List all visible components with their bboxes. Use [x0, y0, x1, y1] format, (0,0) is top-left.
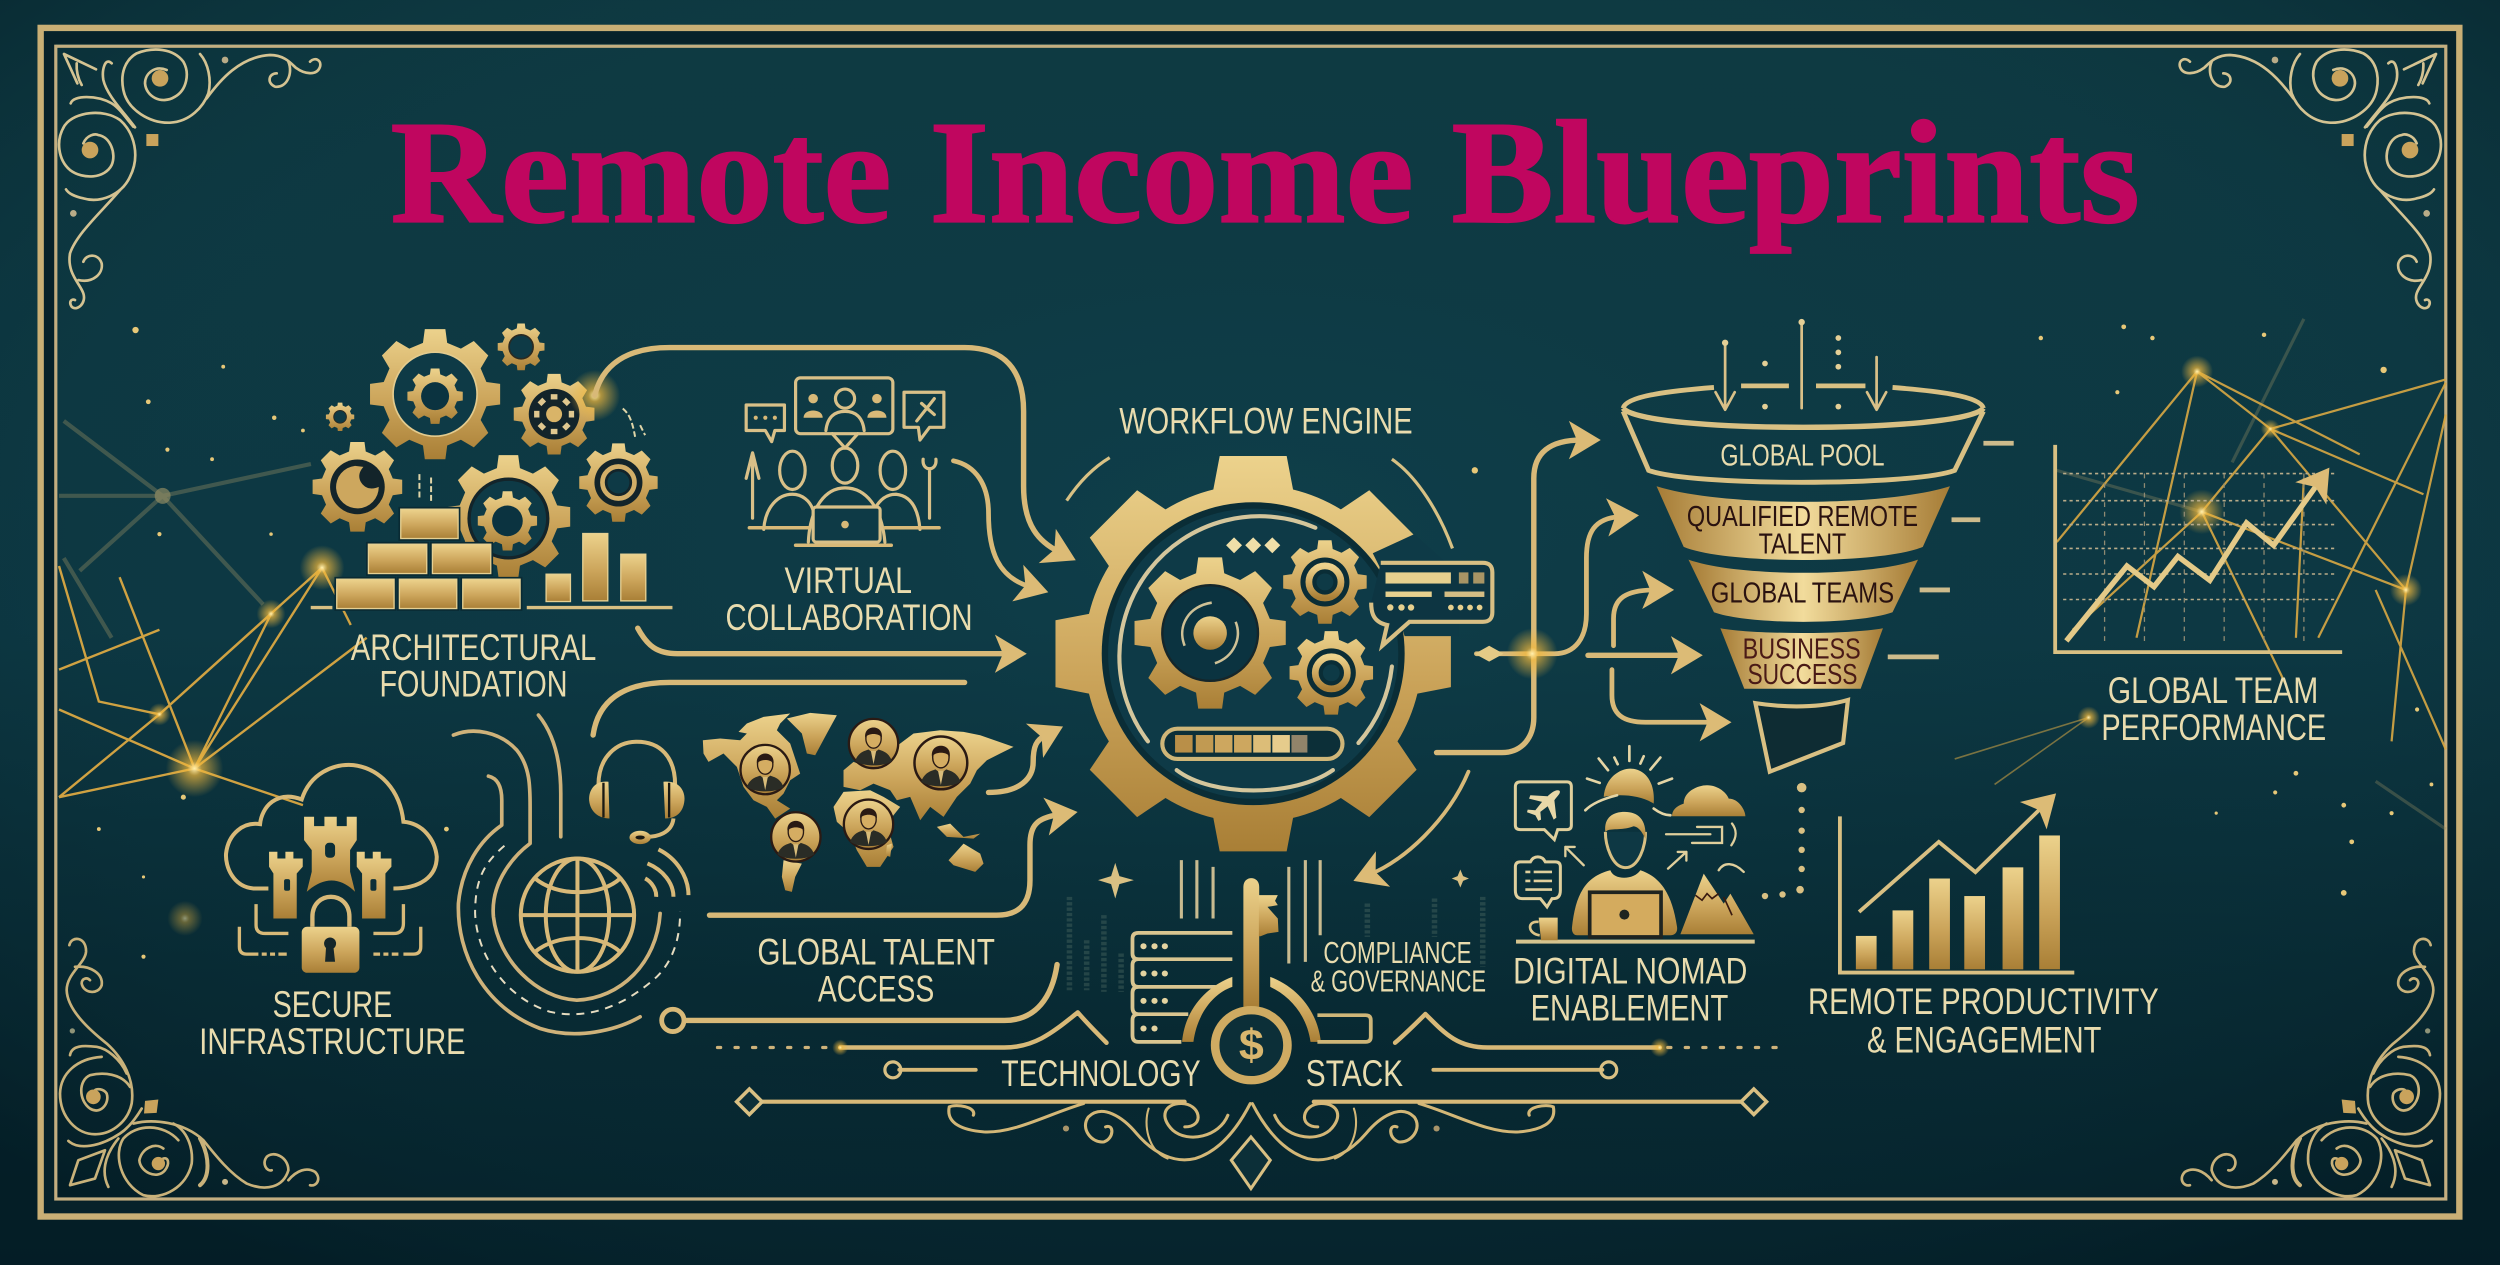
label	[725, 560, 973, 638]
label: compliance	[1311, 937, 1486, 999]
funnel: global pool: GLOBAL POOL	[1720, 440, 1885, 473]
panel: technology stack	[717, 860, 1783, 1189]
dotted connector	[1762, 783, 1806, 899]
label	[199, 984, 466, 1062]
icon: world map with portraits	[703, 713, 1014, 892]
funnel: qualified remote talent: QUALIFIED REMOTE	[1687, 501, 1918, 533]
panel: global team performance	[2055, 445, 2342, 748]
corner ornament: bottom left	[60, 939, 318, 1196]
label: INFRASTRUCTURE	[199, 1021, 466, 1062]
icon: key and dollar coin	[1182, 878, 1371, 1080]
label: technology stack: TECHNOLOGY	[1001, 1053, 1201, 1094]
icon: main gear	[1055, 456, 1492, 851]
label: PERFORMANCE	[2101, 707, 2326, 748]
funnel: business success: SUCCESS	[1747, 659, 1857, 691]
panel: workflow engine	[1055, 401, 1492, 851]
chart: rising bars	[1840, 807, 2074, 973]
label: technology stack	[1001, 1053, 1404, 1094]
label	[2101, 670, 2326, 748]
funnel: global teams: GLOBAL TEAMS	[1711, 578, 1894, 610]
network constellation: left	[59, 421, 367, 936]
icon: inflow arrows	[1716, 319, 1886, 410]
icon: data columns	[1069, 897, 1483, 992]
funnel: global teams	[1688, 560, 1918, 622]
icon: server stack	[1132, 933, 1232, 1042]
panel: digital nomad enablement	[1513, 746, 1755, 1028]
funnel: qualified remote talent: TALENT	[1759, 528, 1846, 560]
big gear	[370, 329, 500, 459]
gear with crescent	[313, 442, 402, 532]
label: COLLABORATION	[725, 597, 973, 638]
label	[1808, 981, 2159, 1060]
funnel: business success	[1720, 628, 1883, 691]
bars	[546, 534, 646, 602]
funnel: spout	[1755, 700, 1848, 772]
decor vertical lines	[1181, 860, 1320, 964]
label: compliance: & GOVERNANCE	[1311, 966, 1486, 999]
label: FOUNDATION	[379, 664, 568, 705]
funnel: qualified remote talent	[1657, 486, 1950, 560]
label: VIRTUAL	[784, 560, 912, 601]
icon: globe, headset and orbit rings	[453, 715, 688, 1034]
mid gear	[447, 455, 570, 579]
chart: line over grid	[2055, 445, 2342, 652]
label: REMOTE PRODUCTIVITY	[1808, 981, 2159, 1022]
icon: key and dollar coin: $	[1239, 1022, 1264, 1070]
funnel side dashes	[1888, 443, 2014, 657]
panel: architectural foundation	[311, 323, 672, 705]
corner ornament: top right	[2180, 50, 2441, 308]
icon: diamonds	[1226, 537, 1280, 553]
icon: key, servers, flourish	[949, 860, 1554, 1189]
label: & ENGAGEMENT	[1867, 1019, 2101, 1060]
panel: global talent access	[703, 713, 1014, 1009]
tiny gear	[326, 403, 354, 431]
icon: sparkles	[1098, 863, 1469, 899]
heading: WORKFLOW ENGINE	[1119, 401, 1413, 442]
connector: lower circuit line	[662, 965, 1057, 1032]
funnel: global pool	[1623, 386, 1983, 482]
corner ornament: top left	[59, 50, 320, 308]
panel: secure infrastructure	[199, 765, 466, 1062]
label	[757, 932, 995, 1009]
label: DIGITAL NOMAD	[1513, 951, 1747, 992]
panel: virtual collaboration	[725, 378, 973, 638]
icon: video call team	[746, 378, 944, 545]
sparkle dots	[97, 324, 2433, 959]
gear with block ring	[514, 374, 594, 455]
label: compliance: COMPLIANCE	[1323, 937, 1472, 970]
label	[351, 627, 596, 705]
label: ENABLEMENT	[1531, 987, 1728, 1028]
title: Remote Income Blueprints	[391, 91, 2140, 254]
connectors: inbound arrows	[569, 348, 1059, 915]
decor arcs	[1067, 458, 1452, 548]
icon: nomad with laptop	[1515, 746, 1755, 944]
ring gear	[579, 443, 658, 522]
funnel: business success: BUSINESS	[1743, 633, 1861, 665]
label: technology stack: STACK	[1306, 1053, 1404, 1094]
ornament: chevron rails	[717, 1012, 1783, 1114]
icon: progress bar	[1162, 729, 1342, 759]
icon: inner gear	[1135, 557, 1286, 709]
network constellation: right	[1955, 319, 2446, 829]
ornament: bottom flourish	[949, 1104, 1554, 1189]
label: GLOBAL TEAM	[2108, 670, 2318, 711]
panel: funnel	[1623, 319, 2014, 899]
label	[1513, 951, 1747, 1028]
label: ARCHITECTURAL	[351, 627, 596, 668]
connectors: outbound arrows to funnel	[1371, 440, 1712, 874]
label: SECURE	[273, 984, 392, 1025]
corner ornament: bottom right	[2182, 939, 2440, 1196]
icon: chat panel	[1371, 563, 1492, 646]
panel: remote productivity and engagement	[1808, 807, 2159, 1060]
small gear top	[498, 323, 544, 370]
bricks	[337, 509, 520, 609]
icon: gears, bricks and bars	[311, 323, 672, 609]
label: GLOBAL TALENT	[757, 932, 995, 973]
icon: cloud, castle and padlock	[226, 765, 437, 973]
label: ACCESS	[818, 968, 934, 1009]
